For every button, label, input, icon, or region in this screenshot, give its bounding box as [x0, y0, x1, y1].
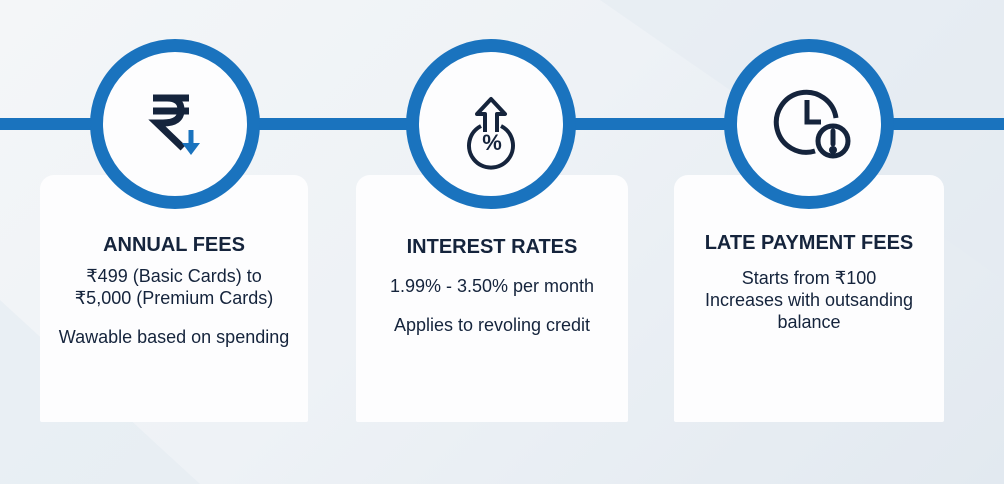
- icon: percent up circle: [406, 39, 576, 209]
- icon: clock alert circle: [724, 39, 894, 209]
- panel: late payment fees: [674, 175, 944, 422]
- text: revolving credit: Applies to revoling credit: [394, 315, 590, 335]
- connector line: [0, 118, 1004, 130]
- text: annual fees range: ₹499 (Basic Cards) to: [86, 266, 262, 286]
- heading: interest rates: INTEREST RATES: [407, 236, 577, 258]
- panel: annual fees: [40, 175, 308, 422]
- text: late fee details: Starts from ₹100: [742, 268, 876, 288]
- text: waivable: Wawable based on spending: [59, 327, 289, 347]
- icon: percent up circle: %: [482, 130, 502, 155]
- panel: interest rates: [356, 175, 628, 422]
- text: rate range: 1.99% - 3.50% per month: [390, 276, 594, 296]
- icon: rupee down circle: [90, 39, 260, 209]
- text: annual fees range: [75, 266, 273, 308]
- text: late fee details: [705, 268, 913, 332]
- text: late fee details: Increases with outsanding: [705, 290, 913, 310]
- heading: late payment fees: LATE PAYMENT FEES: [705, 232, 913, 254]
- heading: annual fees: ANNUAL FEES: [103, 234, 245, 256]
- text: annual fees range: ₹5,000 (Premium Cards): [75, 288, 273, 308]
- text: late fee details: balance: [777, 312, 841, 332]
